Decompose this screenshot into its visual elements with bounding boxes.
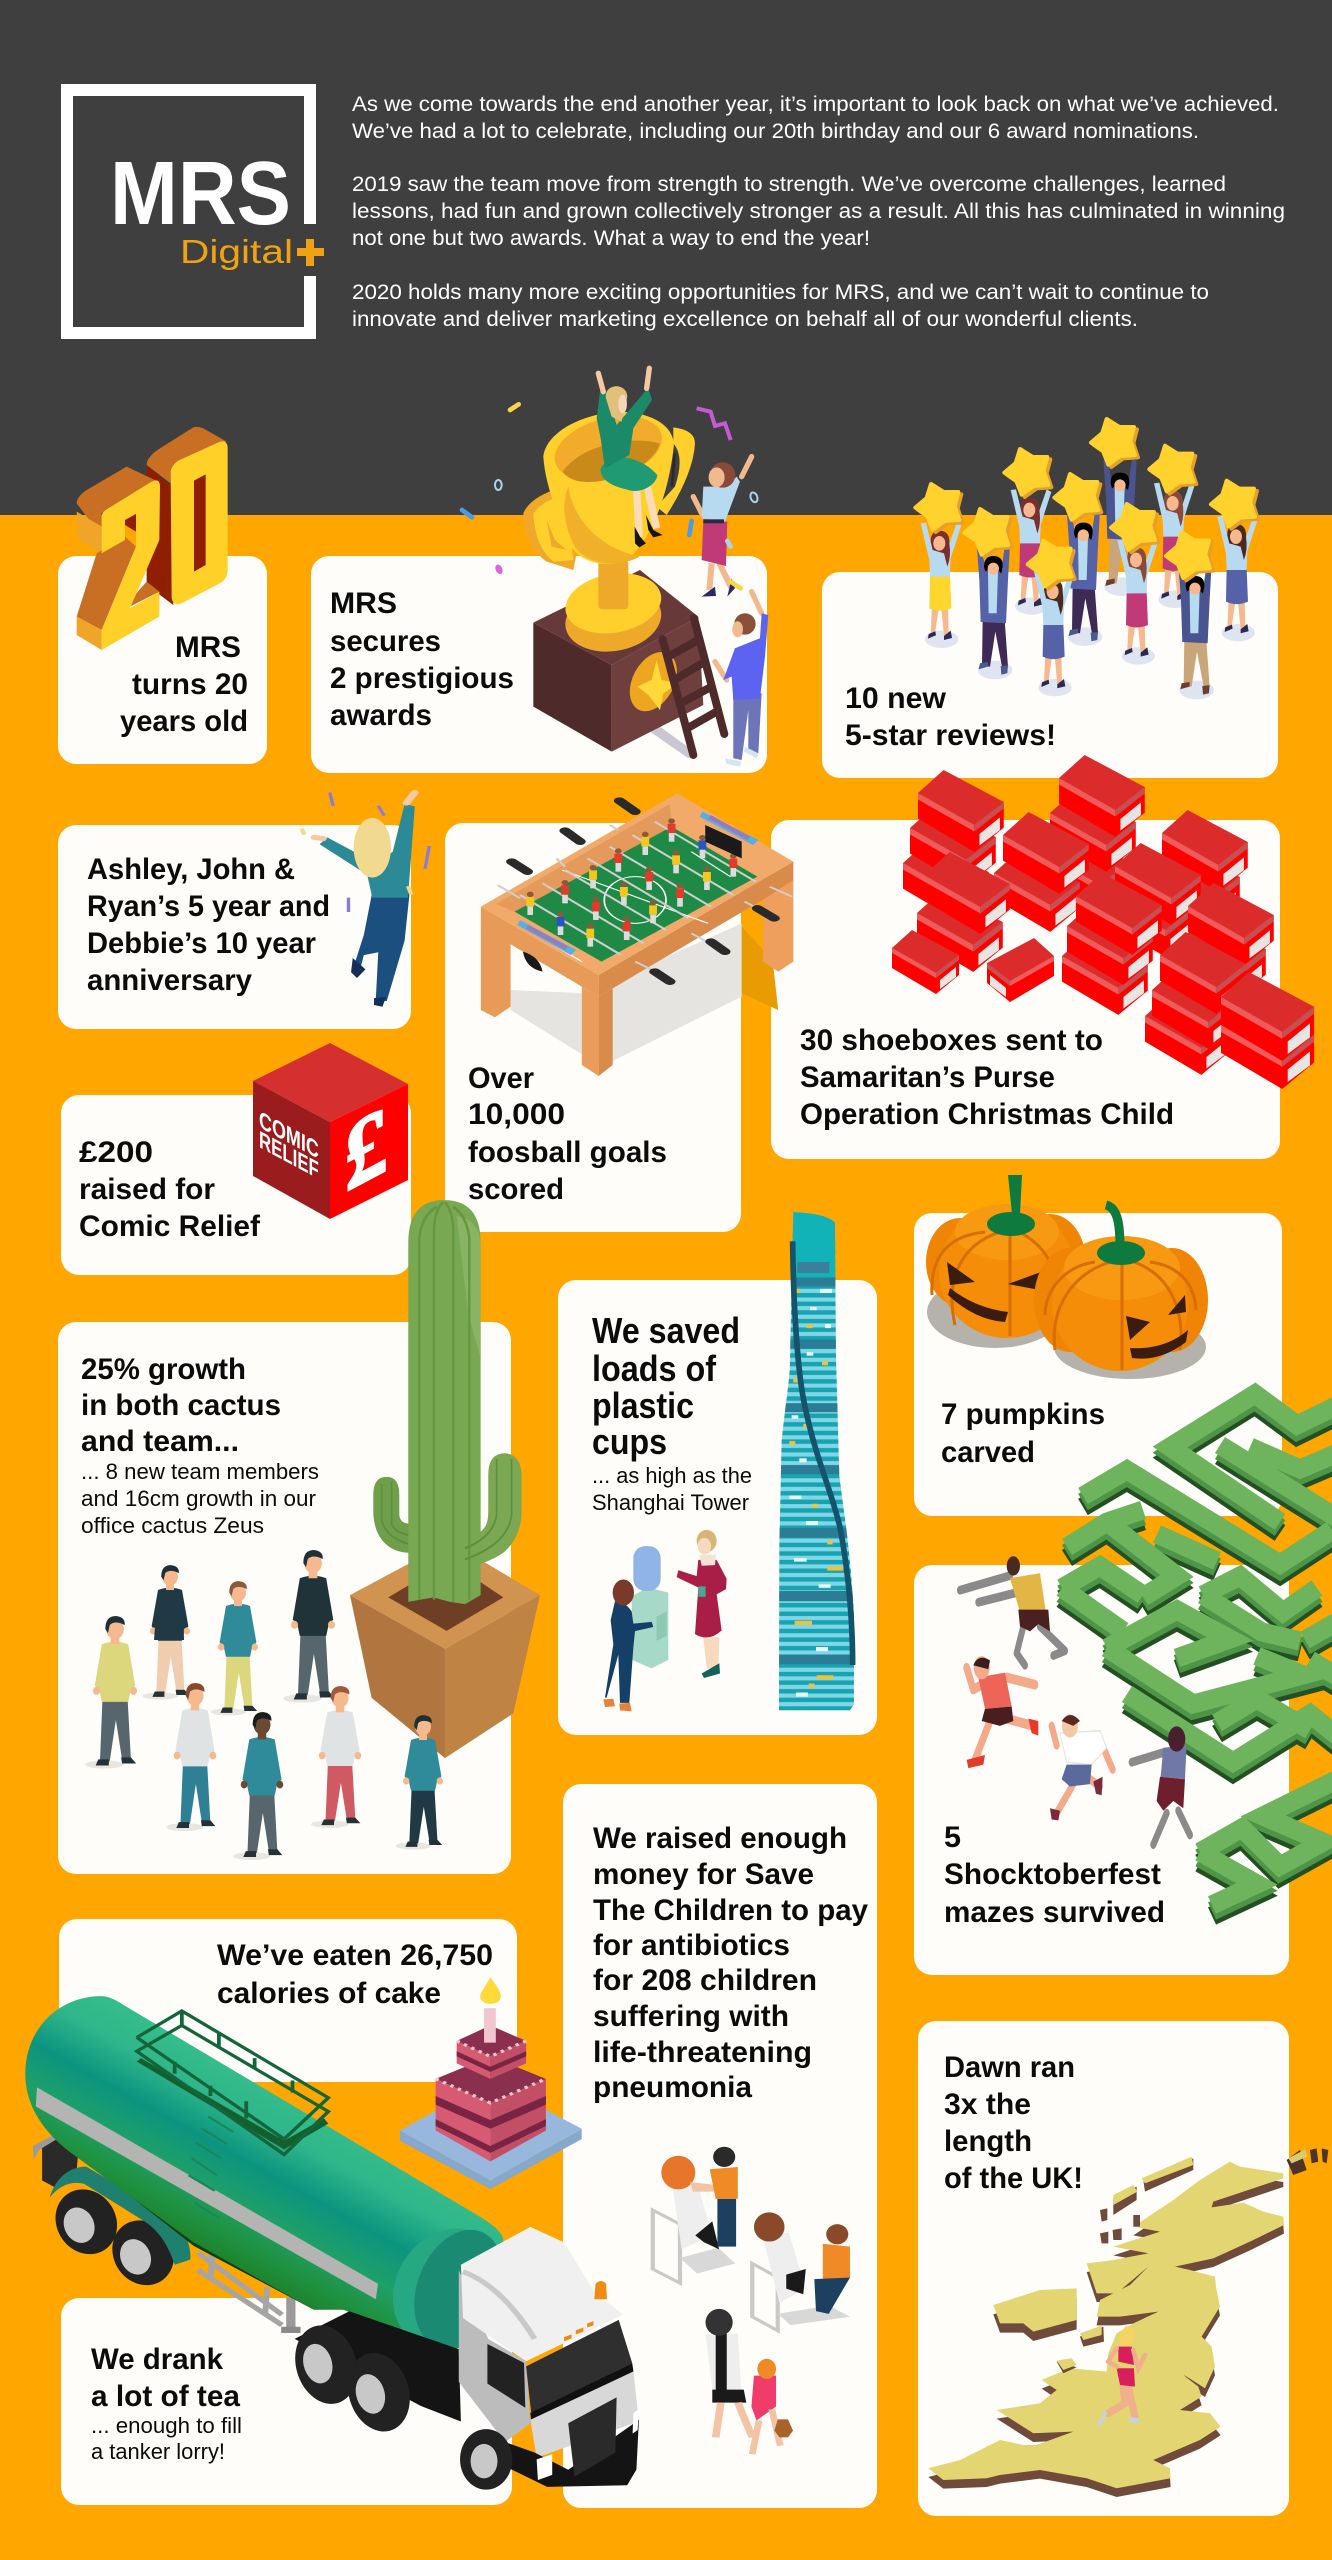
text: £200 raised for Comic Relief: Comic Relief (79, 1210, 261, 1243)
illustration: trophy with people (462, 368, 768, 767)
text: £200 raised for Comic Relief: £200 (79, 1136, 153, 1169)
intro text: 2019 saw the team move from strength to strength. We’ve overcome challenges, learned (352, 172, 1226, 196)
panel: MRS turns 20 (58, 427, 267, 764)
confetti (462, 404, 759, 588)
text: Dawn ran 3x the length of the UK: length (944, 2125, 1032, 2158)
text: calories of cake (217, 1939, 493, 2010)
intro text: We’ve had a lot to celebrate, including our 20th birthday and our 6 award nominations. (352, 119, 1199, 143)
text: raised money for antibiotics: money for Save (593, 1858, 814, 1891)
text: we drank a lot of tea: ... enough to fill (91, 2413, 242, 2438)
illustration: doctors and children (653, 2147, 850, 2454)
panel: shoeboxes (771, 755, 1314, 1159)
panel: pumpkins (914, 1175, 1282, 1516)
intro text: not one but two awards. What a way to end the year! (352, 226, 870, 250)
icon: Comic Relief cube: COMIC (259, 1106, 319, 1165)
panel: tea tanker (25, 1996, 639, 2505)
text: anniversaries: Debbie’s 10 year (87, 927, 316, 960)
illustration: cactus in pot (350, 1200, 540, 1758)
text: we saved loads of plastic cups: ... as high as the (592, 1463, 752, 1488)
text: over 10,000 foosball goals scored: foosball goals (468, 1136, 667, 1169)
intro text: As we come towards the end another year, it’s important to look back on what we’ve achieved. (352, 92, 1279, 116)
text: anniversaries: anniversary (87, 964, 252, 997)
illustration: carved pumpkins (926, 1175, 1208, 1379)
illustration: UK map with runner (928, 2148, 1328, 2497)
runner (1097, 2326, 1145, 2427)
text: raised money for antibiotics: suffering with (593, 2000, 789, 2033)
text: Dawn ran 3x the length of the UK: Dawn ran (944, 2051, 1075, 2084)
panel: cactus and team growth (58, 1200, 540, 1874)
panel: Save The Children (563, 1784, 877, 2508)
text: calories of cake: calories of cake (217, 1977, 441, 2010)
text: Dawn ran 3x the length of the UK: 3x the (944, 2088, 1031, 2121)
icon: Comic Relief cube: £ (345, 1084, 387, 1213)
text: we saved loads of plastic cups: We saved (592, 1310, 740, 1351)
text: 25% growth: 25% growth (81, 1353, 246, 1386)
panel: Comic Relief (61, 1043, 411, 1275)
icon: Comic Relief cube (253, 1043, 408, 1219)
text: we saved loads of plastic cups: plastic (592, 1385, 694, 1426)
text: 30 shoeboxes: Samaritan’s Purse (800, 1061, 1055, 1094)
text: 30 shoeboxes (800, 1024, 1174, 1131)
text: raised money for antibiotics: pneumonia (593, 2071, 752, 2104)
text: 10 new 5-star reviews: 5-star reviews! (845, 719, 1056, 752)
text: over 10,000 foosball goals scored: Over (468, 1062, 534, 1095)
text: 7 pumpkins carved (941, 1398, 1105, 1469)
text: 7 pumpkins carved: 7 pumpkins (941, 1398, 1105, 1431)
illustration: team members (85, 1550, 443, 1860)
header band (0, 0, 1332, 515)
text: we drank a lot of tea (91, 2343, 242, 2464)
text: 25% growth: in both cactus (81, 1389, 281, 1422)
panel: Dawn ran UK (918, 2021, 1328, 2516)
text: we saved loads of plastic cups: Shanghai Tower (592, 1490, 749, 1515)
panel: anniversaries (58, 793, 429, 1029)
text: 25% growth: office cactus Zeus (81, 1513, 264, 1538)
illustration: water cooler chat (603, 1530, 727, 1711)
text: MRS secures 2 prestigious awards: secures (330, 625, 441, 658)
text: MRS secures 2 prestigious awards: awards (330, 699, 432, 732)
text: MRS secures 2 prestigious awards: MRS (330, 587, 397, 620)
intro text: lessons, had fun and grown collectively stronger as a result. All this has culminated in winning (352, 199, 1285, 223)
text: MRS turns 20 years old: years old (120, 705, 248, 738)
text: Dawn ran 3x the length of the UK (944, 2051, 1083, 2195)
text: calories of cake: We’ve eaten 26,750 (217, 1939, 493, 1972)
text: raised money for antibiotics: life-threatening (593, 2036, 812, 2069)
text: 5 Shocktoberfest mazes survived: 5 (944, 1821, 961, 1854)
panel: cake calories (59, 1919, 582, 2189)
text: anniversaries: Ryan’s 5 year and (87, 890, 330, 923)
text: MRS secures 2 prestigious awards (330, 587, 514, 732)
illustration: tanker lorry (25, 1996, 639, 2490)
text: £200 raised for Comic Relief: raised for (79, 1173, 215, 1206)
text: MRS turns 20 years old (120, 631, 248, 738)
text: 10 new 5-star reviews: 10 new (845, 682, 947, 715)
text: anniversaries (87, 853, 330, 997)
text: 5 Shocktoberfest mazes survived: Shocktoberfest (944, 1858, 1161, 1891)
text: we saved loads of plastic cups (592, 1310, 752, 1515)
text: over 10,000 foosball goals scored: scored (468, 1173, 564, 1206)
icon: 3D number 20 (77, 427, 228, 650)
panel: plastic cups (558, 1210, 877, 1735)
text: 30 shoeboxes: Operation Christmas Child (800, 1098, 1174, 1131)
panel: 5-star reviews (822, 419, 1278, 778)
text: raised money for antibiotics: for 208 children (593, 1964, 817, 1997)
panel: Shocktoberfest mazes (914, 1394, 1332, 1975)
intro text: innovate and deliver marketing excellence on behalf all of our wonderful clients. (352, 307, 1138, 331)
illustration: foosball table (481, 793, 793, 1076)
text: 5 Shocktoberfest mazes survived (944, 1821, 1165, 1929)
illustration: people holding up stars (915, 419, 1258, 699)
text: we saved loads of plastic cups: cups (592, 1421, 667, 1462)
text: 25% growth: and team... (81, 1425, 239, 1458)
text: raised money for antibiotics (593, 1822, 868, 2104)
logo: MRS (110, 144, 291, 244)
text: 30 shoeboxes: 30 shoeboxes sent to (800, 1024, 1103, 1057)
text: MRS turns 20 years old: turns 20 (132, 668, 248, 701)
text: we drank a lot of tea: a lot of tea (91, 2380, 240, 2413)
illustration: hedge maze (1062, 1394, 1332, 1916)
illustration: Shanghai Tower (779, 1212, 856, 1710)
text: 25% growth (81, 1353, 319, 1538)
logo: Digital (180, 233, 293, 270)
intro text: 2020 holds many more exciting opportunities for MRS, and we can’t wait to continue to (352, 280, 1209, 304)
text: anniversaries: Ashley, John & (87, 853, 295, 886)
text: MRS secures 2 prestigious awards: 2 prestigious (330, 662, 514, 695)
text: 25% growth: and 16cm growth in our (81, 1486, 316, 1511)
text: raised money for antibiotics: The Children to pay (593, 1894, 868, 1927)
text: 5 Shocktoberfest mazes survived: mazes survived (944, 1896, 1165, 1929)
illustration: layered cake (400, 1977, 582, 2189)
text: 10 new 5-star reviews (845, 682, 1056, 752)
illustration: dancing woman with confetti (302, 793, 429, 1007)
illustration: zombies and runners (960, 1556, 1190, 1845)
text: Dawn ran 3x the length of the UK: of the UK! (944, 2162, 1083, 2195)
icon: Comic Relief cube: RELIEF (259, 1126, 319, 1185)
text: over 10,000 foosball goals scored: 10,000 (468, 1098, 565, 1131)
text: we saved loads of plastic cups: loads of (592, 1348, 717, 1389)
text: 25% growth: ... 8 new team members (81, 1459, 319, 1484)
text: over 10,000 foosball goals scored (468, 1062, 667, 1206)
panel: two prestigious awards (311, 368, 768, 773)
text: we drank a lot of tea: a tanker lorry! (91, 2439, 225, 2464)
text: we drank a lot of tea: We drank (91, 2343, 223, 2376)
logo (67, 90, 324, 333)
panel: foosball (445, 793, 793, 1232)
text: 7 pumpkins carved: carved (941, 1436, 1035, 1469)
text: raised money for antibiotics: for antibiotics (593, 1929, 790, 1962)
illustration: red shoebox stacks (892, 755, 1314, 1089)
text: £200 raised for Comic Relief (79, 1136, 261, 1243)
text: raised money for antibiotics: We raised enough (593, 1822, 847, 1855)
text: MRS turns 20 years old: MRS (175, 631, 241, 664)
intro text (352, 92, 1285, 331)
